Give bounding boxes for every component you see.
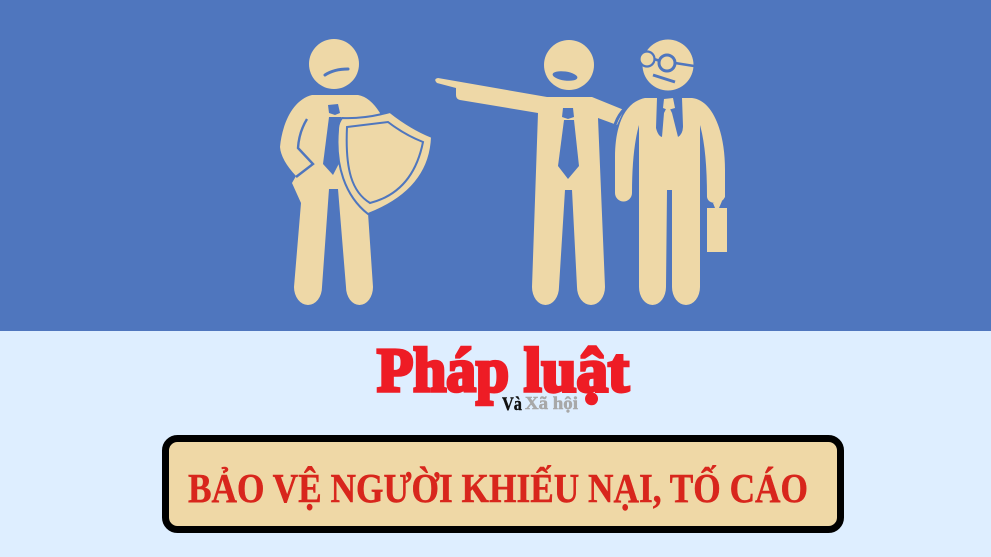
panel: light lower background (0, 331, 991, 557)
logo: Pháp luật Và Xã hội: luật (524, 337, 629, 405)
title: BẢO VỆ NGƯỜI KHIẾU NẠI, TỐ CÁO (188, 465, 808, 511)
icon: man with shield (280, 39, 432, 305)
logo: Pháp luật Và Xã hội (377, 337, 629, 415)
logo: Pháp luật Và Xã hội: Xã hội (525, 393, 578, 413)
icon: man with glasses and briefcase (614, 40, 727, 305)
logo: Pháp luật Và Xã hội: Pháp (377, 337, 509, 405)
banner: title box (166, 438, 840, 530)
logo: Pháp luật Và Xã hội: Và (502, 394, 522, 415)
icon: pointing man (435, 40, 624, 305)
panel: blue illustration background (0, 0, 991, 331)
